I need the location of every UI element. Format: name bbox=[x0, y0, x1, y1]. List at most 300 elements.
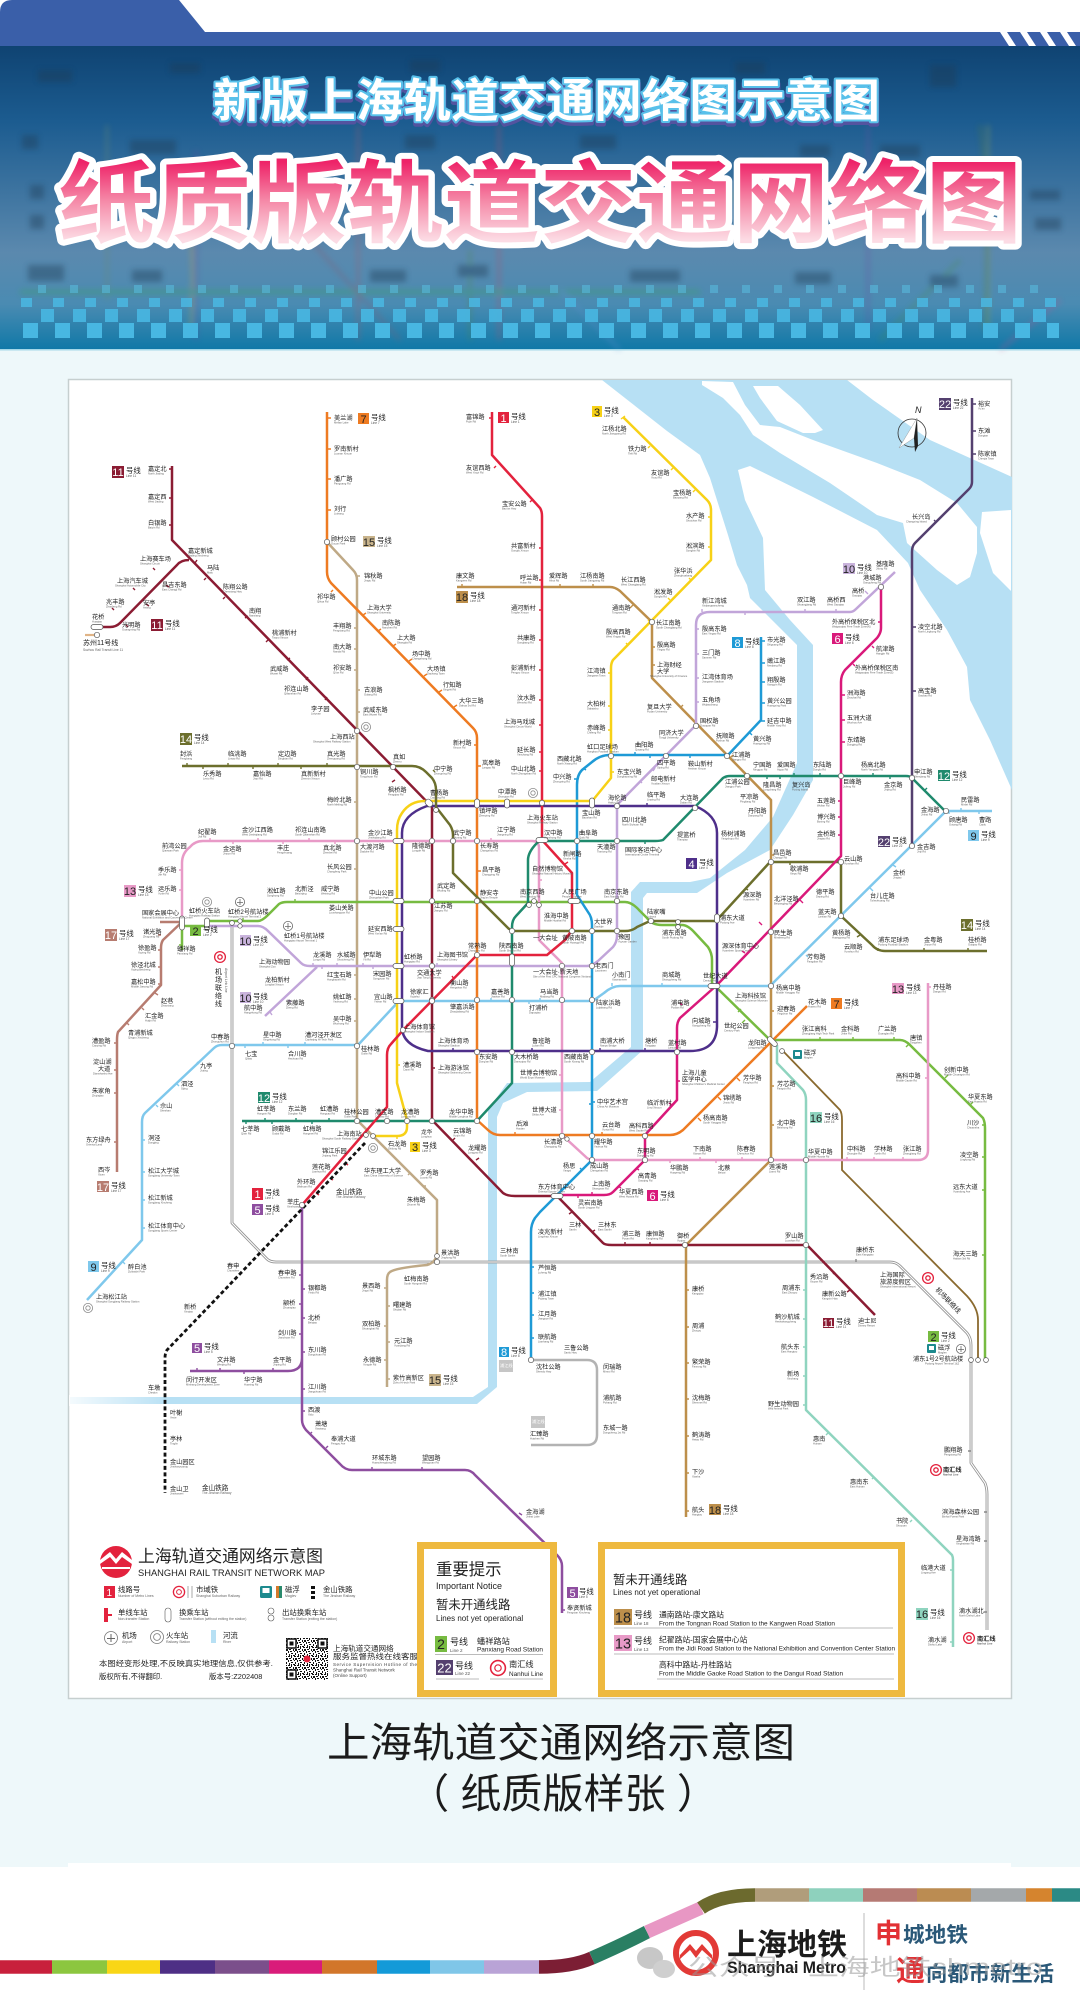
station labels: line 8 and 9: Middle Yanji Rd bbox=[767, 724, 786, 728]
station labels: line 10, 12, 18: 虹漕路 bbox=[320, 1106, 339, 1113]
Nanhui line labels: 南汇线 bbox=[943, 1467, 962, 1474]
station labels: line 10, 12, 18: 航中路 bbox=[244, 1005, 263, 1012]
station labels: line 1: Pengpu Xincun bbox=[511, 670, 530, 674]
vertical label: Airport Link Line: 联 bbox=[215, 983, 222, 992]
station labels: line 13, 14, 17: Yunshun Rd bbox=[844, 950, 859, 954]
station labels: line 8 and 9: Shendu Hwy bbox=[536, 1370, 552, 1374]
station labels: line 13, 14, 17: 青浦新城 bbox=[128, 1030, 153, 1037]
panel: lines not yet operational bbox=[602, 1546, 902, 1694]
station labels: line 4 and 6: 大木桥路 bbox=[514, 1054, 539, 1061]
hotline text bbox=[333, 1643, 418, 1678]
station labels: line 7: Yaohua Rd bbox=[594, 1144, 608, 1148]
line: Pujiang gray bbox=[531, 1360, 597, 1445]
legend title: SHANGHAI RAIL TRANSIT NETWORK MAP bbox=[138, 1568, 325, 1578]
station labels: line 13, 14, 17: Middle Jiasong Rd bbox=[131, 984, 154, 988]
station labels: line 10, 12, 18: 新江湾城 bbox=[702, 598, 727, 605]
station labels: line 8 and 9: Dashijie bbox=[594, 924, 604, 928]
station labels: line 8 and 9 bbox=[96, 636, 992, 1440]
station labels: line 8 and 9: 鞍山新村 bbox=[688, 761, 713, 768]
station labels: line 15: Yuanjiang Rd bbox=[394, 1344, 410, 1348]
line 9 bbox=[87, 808, 992, 1300]
Nanhui line labels: Nanhui Line bbox=[943, 1472, 959, 1476]
station labels: line 8 and 9: 江月路 bbox=[538, 1311, 557, 1318]
station labels: line 7: 高科西路 bbox=[629, 1123, 654, 1130]
station labels: line 10, 12, 18: Xiepu Rd bbox=[790, 872, 802, 876]
station labels: line 10, 12, 18: 爱国路 bbox=[777, 762, 796, 769]
legend: river: River bbox=[223, 1640, 232, 1644]
station labels: line 10, 12, 18: Yingao Rd bbox=[657, 648, 670, 652]
station labels: line 10, 12, 18: 康文路 bbox=[456, 573, 475, 580]
station labels: line 13, 14, 17: 真光路 bbox=[327, 751, 346, 758]
station labels: line 8 and 9: 陆家浜路 bbox=[596, 1000, 621, 1007]
station labels: line 7: Liuhang bbox=[334, 512, 344, 516]
station labels: line 8 and 9: 翔殷路 bbox=[767, 677, 786, 684]
station labels: line 8 and 9: Middle Yanggao Rd bbox=[776, 990, 800, 994]
compass: N bbox=[915, 405, 922, 415]
station labels: line 10, 12, 18: Fudan University bbox=[647, 710, 668, 714]
station labels: line 10, 12, 18: Hangtou bbox=[692, 1512, 703, 1516]
station labels: line 11: Fengqiao Rd bbox=[388, 792, 404, 796]
station labels: line 15: Guilin Park bbox=[344, 1114, 358, 1118]
station labels: line 8 and 9: Lantian Rd bbox=[818, 914, 832, 918]
station labels: line 16, 22, 5, railway: 滴水湖北 bbox=[959, 1608, 984, 1615]
station labels: line 10, 12, 18: Jinjing Rd bbox=[884, 788, 896, 792]
Shanghai Metro logo bbox=[676, 1933, 716, 1973]
line badges: 6 bbox=[649, 1191, 656, 1203]
station labels: line 4 and 6: Xiangcheng Rd bbox=[692, 1024, 711, 1028]
station labels: line 10, 12, 18: Shuicheng Rd bbox=[337, 958, 354, 962]
station labels: line 7: South Yanggao Rd bbox=[703, 1120, 726, 1124]
station labels: line 16, 22, 5, railway: 剑川路 bbox=[278, 1330, 297, 1337]
station labels: line 2: 凌空路 bbox=[960, 1152, 979, 1159]
station labels: line 13, 14, 17: 世博会博物馆 bbox=[520, 1070, 557, 1077]
station labels: line 13, 14, 17: 陈春路 bbox=[737, 1146, 756, 1153]
station labels: line 13, 14, 17: Middle Gaoke Rd bbox=[896, 1078, 917, 1082]
line badges: Line 14 bbox=[194, 741, 205, 745]
station labels: line 1: Gongkang Rd bbox=[517, 640, 534, 644]
station labels: line 13, 14, 17: Zhaoxiang bbox=[161, 1004, 174, 1008]
station labels: line 11: Zhenru bbox=[393, 760, 402, 764]
station labels: line 7: 岚皋路 bbox=[482, 760, 501, 767]
row: line 13: 纪翟路站-国家会展中心站 bbox=[659, 1634, 748, 1644]
station labels: line 10, 12, 18: Pingliang Rd bbox=[740, 800, 756, 804]
station labels: line 4 and 6: 大连路 bbox=[680, 795, 699, 802]
station labels: line 8 and 9: Sanlu Hwy bbox=[564, 1350, 578, 1354]
station labels: line 11: Shanghai Circuit bbox=[140, 562, 160, 566]
station labels: line 2: 海天三路 bbox=[953, 1251, 978, 1258]
station labels: line 11: 徐家汇 bbox=[410, 989, 429, 996]
station labels: line 7: Shangda Rd bbox=[397, 640, 412, 644]
station labels: line 8 and 9: 中华艺术宫 bbox=[597, 1099, 628, 1106]
hotline text: (Online Support) bbox=[333, 1673, 367, 1678]
station labels: line 10, 12, 18: 天潼路 bbox=[597, 844, 616, 851]
station labels: line 1: Lianhua Rd bbox=[312, 1170, 326, 1174]
station labels: line 8 and 9: 曹路 bbox=[979, 817, 991, 824]
station labels: line 10, 12, 18: 上海财经 bbox=[657, 662, 682, 669]
station labels: line 11: Malu bbox=[207, 570, 213, 574]
station labels: line 4 and 6: Dongjing Rd bbox=[847, 742, 862, 746]
row: line 18: Line 18 bbox=[634, 1621, 649, 1626]
notice: Nanhui line: Nanhui Line bbox=[509, 1671, 544, 1678]
station labels: line 15: Shujian Rd bbox=[393, 1308, 407, 1312]
station labels: line 13, 14, 17: National Exhibition and Convention Center bbox=[142, 916, 193, 920]
line badges: 号线 bbox=[111, 1181, 126, 1190]
station labels: line 8 and 9: China Art Museum bbox=[597, 1104, 620, 1108]
station labels: line 15: 桂林路 bbox=[361, 1046, 380, 1053]
checker pattern bbox=[21, 285, 1059, 338]
row: line 18: From the Tongnan Road Station to the Kangwen Road Station bbox=[659, 1620, 836, 1628]
station labels: line 3: Caoxi Rd bbox=[403, 1068, 415, 1072]
station labels: line 11: 三林东 bbox=[598, 1222, 617, 1229]
station labels: line 16, 22, 5, railway: 春申 bbox=[227, 1263, 239, 1270]
station labels: line 11: Kangxin Hwy bbox=[822, 1296, 838, 1300]
station labels: line 10, 12, 18: 上海图书馆 bbox=[437, 952, 468, 959]
station labels: line 13, 14, 17: 金粤路 bbox=[924, 937, 943, 944]
station labels: line 10, 12, 18: 虹桥1号航站楼 bbox=[284, 933, 325, 940]
row: line 13: Line 13 bbox=[634, 1647, 649, 1652]
station labels: line 13, 14, 17: Zhongning Rd bbox=[434, 772, 451, 776]
slogan bbox=[875, 1919, 1054, 1988]
station labels: line 3: Zhanghuabang bbox=[674, 574, 693, 578]
station labels: line 8 and 9: Luheng Rd bbox=[538, 1270, 552, 1274]
station labels: line 15: 曙建路 bbox=[393, 1302, 412, 1309]
station labels: line 11: 康新公路 bbox=[822, 1291, 847, 1298]
station labels: line 15 bbox=[313, 572, 460, 1384]
station labels: line 4 and 6: 南浦大桥 bbox=[600, 1038, 625, 1045]
station labels: line 4 and 6: 医学中心 bbox=[682, 1075, 707, 1083]
station labels: line 13, 14, 17: Chenchun Rd bbox=[737, 1152, 754, 1156]
station labels: line 15: Wuzhong Rd bbox=[333, 1022, 349, 1026]
station labels: line 10, 12, 18: Tiantong Rd bbox=[597, 850, 612, 854]
line badges: 号线 bbox=[377, 536, 392, 545]
station labels: line 4 and 6: 临平路 bbox=[647, 792, 666, 799]
station labels: line 10, 12, 18: Shenjiang Rd bbox=[914, 774, 931, 778]
Suzhou 11 connector bbox=[85, 634, 97, 636]
station labels: line 4 and 6: Pudian Rd bbox=[671, 1006, 684, 1010]
station labels: line 4 and 6: Waigaoqiao Free Trade Zone(N) bbox=[832, 624, 871, 628]
station labels: line 8 and 9: 黄兴公园 bbox=[767, 698, 792, 705]
heading: 暂未开通线路 bbox=[613, 1572, 688, 1587]
station labels: line 4 and 6: Wulian Rd bbox=[817, 804, 830, 808]
station labels: line 11: Suzhou Rail Transit Line 11 bbox=[83, 648, 123, 652]
station labels: line 8 and 9: Xingzhong Rd bbox=[263, 1038, 280, 1042]
station labels: line 8 and 9: 漕河泾开发区 bbox=[305, 1032, 342, 1039]
station labels: line 11: Oriental Sports Center bbox=[538, 1190, 565, 1194]
station labels: line 3: West Yingao Rd bbox=[606, 634, 626, 638]
station labels: line 4 and 6: 浦东大道 bbox=[720, 915, 745, 922]
main title: 纸质版轨道交通网络图 bbox=[58, 155, 1022, 255]
line badges: Line 13 bbox=[138, 893, 149, 897]
station labels: line 16, 22, 5, railway: 文井路 bbox=[217, 1357, 236, 1364]
station labels: line 10, 12, 18: 一大会址·新天地 bbox=[533, 969, 578, 976]
station labels: line 13, 14, 17: West Jinshajiang Rd bbox=[242, 832, 267, 836]
line 17 bbox=[114, 922, 182, 1172]
line badges: Line 3 bbox=[422, 1149, 431, 1153]
station labels: line 2: Weining Rd bbox=[321, 892, 335, 896]
line badges: Line 9 bbox=[101, 1269, 110, 1273]
station labels: line 16, 22, 5, railway: 奉浦大道 bbox=[331, 1436, 356, 1443]
station labels: line 7: 锦绣路 bbox=[723, 1095, 742, 1102]
station labels: line 4 and 6: 上海儿童 bbox=[682, 1070, 707, 1077]
line badges: 10 bbox=[239, 993, 252, 1005]
station labels: line 8 and 9: 联航路 bbox=[538, 1334, 557, 1341]
station labels: line 16, 22, 5, railway: Gaobao Rd bbox=[918, 694, 932, 698]
station labels: line 1: 外环路 bbox=[297, 1179, 316, 1186]
station labels: line 4 and 6: South Xizang Rd bbox=[564, 1060, 585, 1064]
station labels: line 16, 22, 5, railway: 金平路 bbox=[273, 1357, 292, 1364]
station labels: line 10, 12, 18 bbox=[241, 572, 940, 1516]
line badges: 6 bbox=[834, 634, 841, 646]
station labels: line 2: 金科路 bbox=[841, 1026, 860, 1033]
station labels: line 13, 14, 17: Middle Huaihai Rd bbox=[544, 918, 566, 922]
station labels: line 10, 12, 18: 歇浦路 bbox=[790, 866, 809, 873]
station labels: line 16, 22, 5, railway: 磁浮 bbox=[804, 1050, 816, 1057]
station labels: line 16, 22, 5, railway: 银都路 bbox=[308, 1285, 327, 1292]
row: line 13: From the Jidi Road Station to the National Exhibition and Convention Center Station bbox=[659, 1646, 896, 1652]
station labels: line 4 and 6: 外高桥保税区北 bbox=[832, 619, 875, 626]
station labels: line 15: Yongde Rd bbox=[363, 1362, 377, 1366]
station labels: line 2 bbox=[177, 885, 994, 1366]
station labels: line 10, 12, 18: 虹梅路 bbox=[303, 1126, 322, 1133]
station labels: line 10, 12, 18: 虹莘路 bbox=[257, 1106, 276, 1113]
station labels: line 8 and 9: 马当路 bbox=[540, 989, 559, 996]
station labels: line 13, 14, 17: Zhuguang Rd bbox=[143, 934, 160, 938]
station labels: line 11: 陈翔公路 bbox=[223, 584, 248, 591]
station labels: line 3: Dongbaoxing Rd bbox=[617, 774, 638, 778]
station labels: line 16, 22, 5, railway: 亭林 bbox=[170, 1436, 182, 1443]
station labels: line 2: 唐镇 bbox=[910, 1035, 922, 1042]
station labels: line 8 and 9: 松江大学城 bbox=[148, 1168, 179, 1175]
station labels: line 4 and 6: Yuanshen Sports Centre bbox=[722, 948, 752, 952]
line badges: 号线 bbox=[824, 1112, 839, 1121]
station labels: line 3: 宝山路 bbox=[582, 810, 601, 817]
station labels: line 10, 12, 18: Fangxin Rd bbox=[777, 1086, 791, 1090]
station labels: line 11: 罗山路 bbox=[785, 1233, 804, 1240]
station labels: line 13, 14, 17: 纪翟路 bbox=[198, 829, 217, 836]
station labels: line 8 and 9: Xiangyin Rd bbox=[767, 682, 782, 686]
line badges: 号线 bbox=[101, 1261, 116, 1270]
line badges: 8 bbox=[501, 1347, 507, 1359]
station labels: line 8 and 9: Lujiabang Rd bbox=[596, 1006, 612, 1010]
station labels: line 2: Pudong Airport Terminal 1&2 bbox=[925, 1362, 960, 1366]
station labels: line 11: Wuwei Rd bbox=[270, 672, 283, 676]
station labels: line 4 and 6: 洲海路 bbox=[847, 690, 866, 697]
station labels: line 3: Jiangwan Town bbox=[587, 674, 606, 678]
slogan: 通 bbox=[896, 1956, 925, 1988]
panel: network map bbox=[68, 380, 1012, 1698]
station labels: line 11: Disney Resort bbox=[858, 1324, 875, 1328]
station labels: line 15: Jinqiu Rd bbox=[364, 578, 376, 582]
station labels: line 7: 龙华中路 bbox=[449, 1109, 474, 1116]
station labels: line 3: 大柏树 bbox=[587, 701, 606, 708]
station labels: line 13, 14, 17: 定边路 bbox=[278, 751, 297, 758]
line 8 bbox=[531, 637, 765, 1358]
station labels: line 8 and 9: 成山路 bbox=[590, 1163, 609, 1170]
line badges: 17 bbox=[105, 930, 117, 942]
line badges: Line 11 bbox=[836, 1325, 846, 1329]
station labels: line 8 and 9: Jinqiao bbox=[893, 876, 902, 880]
footer panel bbox=[0, 1863, 1080, 1990]
station labels: line 16, 22, 5, railway: 望园路 bbox=[422, 1455, 441, 1462]
station labels: line 16, 22, 5, railway: Xinghaiwan Rd bbox=[956, 1542, 975, 1546]
line badges: Line 18 bbox=[470, 599, 481, 603]
station labels: line 7: Meilan Lake bbox=[334, 420, 349, 424]
station labels: line 4 and 6: Jinqiao Rd bbox=[817, 836, 830, 840]
station labels: line 15: East China University of Science bbox=[364, 1174, 403, 1178]
station labels: line 7: 东安路 bbox=[479, 1054, 498, 1061]
line badges: Line 8 bbox=[745, 645, 754, 649]
station labels: line 4 and 6: Shuangjiang Rd bbox=[797, 602, 817, 606]
station labels: line 2: 张江高科 bbox=[802, 1026, 827, 1033]
station labels: line 8 and 9: 合川路 bbox=[288, 1051, 307, 1058]
station labels: line 8 and 9: 洞泾 bbox=[148, 1135, 160, 1142]
station labels: line 1: West Youyi Rd bbox=[466, 470, 484, 474]
station labels: line 11: 李子园 bbox=[311, 706, 330, 713]
station labels: line 16, 22, 5, railway: 颛桥 bbox=[283, 1300, 295, 1307]
station labels: line 10, 12, 18: South Changjiang Rd bbox=[656, 626, 682, 630]
station labels: line 4 and 6: 临沂新村 bbox=[647, 1100, 672, 1107]
station labels: line 11: Shanghai Swimming Center bbox=[438, 1070, 471, 1074]
row: Gaoke to Dangui: 高科中路站-丹桂路站 bbox=[659, 1660, 732, 1670]
station labels: line 11: 嘉定新城 bbox=[188, 548, 213, 555]
station labels: line 11: Baiyin Rd bbox=[148, 526, 160, 530]
station labels: line 13, 14, 17: 浦东足球场 bbox=[878, 937, 909, 944]
station labels: line 7: 刘行 bbox=[334, 506, 346, 513]
legend: river bbox=[211, 1630, 238, 1644]
station labels: line 13, 14, 17: 大道 bbox=[98, 1066, 110, 1073]
station labels: line 11: Shanghai Automobile City bbox=[115, 584, 146, 588]
station labels: line 10, 12, 18: Tongji University bbox=[659, 736, 679, 740]
station labels: line 7: 耀华路 bbox=[594, 1139, 613, 1146]
legend: line number: 线路号 bbox=[118, 1585, 140, 1594]
station labels: line 8 and 9: 金桥 bbox=[893, 870, 905, 877]
station labels: line 13, 14, 17: Jinyun Rd bbox=[223, 852, 235, 856]
station labels: line 10, 12, 18: 通南路 bbox=[612, 605, 631, 612]
station labels: line 3: Baoshan Rd bbox=[582, 816, 597, 820]
station labels: line 3: 中潭路 bbox=[498, 789, 517, 796]
Nanhui line labels bbox=[943, 1466, 996, 1646]
station labels: line 10, 12, 18: Shenmei Rd bbox=[692, 1400, 707, 1404]
station labels: line 16, 22, 5, railway: Jianchuan Rd bbox=[278, 1336, 295, 1340]
station labels: line 13, 14, 17: 运乐路 bbox=[158, 886, 177, 893]
station labels: line 10, 12, 18: Yili Rd bbox=[363, 958, 371, 962]
station labels: line 15: 红宝石路 bbox=[327, 972, 352, 979]
station labels: line 8 and 9: Madang Rd bbox=[540, 994, 554, 998]
notice heading: 重要提示 bbox=[436, 1561, 502, 1579]
station labels: line 3: 延安西路 bbox=[368, 926, 393, 933]
station labels: line 16, 22, 5, railway: Jinshanyuanqu bbox=[170, 1464, 189, 1468]
station labels: line 2: Lujiazui bbox=[647, 914, 657, 918]
station labels: line 11: 上海赛车场 bbox=[140, 556, 171, 563]
line badges: 号线 bbox=[836, 1317, 851, 1326]
station labels: line 13, 14, 17: 武定路 bbox=[437, 883, 456, 890]
station labels: line 2: Tangzhen bbox=[910, 1040, 922, 1044]
page background bbox=[0, 350, 1080, 1867]
station labels: line 4 and 6: Deping Rd bbox=[816, 894, 829, 898]
station labels: line 7: 行知路 bbox=[443, 682, 462, 689]
station labels: line 4 and 6: 五莲路 bbox=[817, 798, 836, 805]
line badges: Line 17 bbox=[119, 937, 130, 941]
station labels: line 10, 12, 18: Hongcao Rd bbox=[320, 1112, 335, 1116]
station labels: line 11: East Changji Rd bbox=[162, 588, 182, 592]
station labels: line 13, 14, 17: 乐秀路 bbox=[203, 771, 222, 778]
station labels: line 4 and 6: 东靖路 bbox=[847, 737, 866, 744]
station labels: line 10, 12, 18: Hongxin Rd bbox=[257, 1112, 272, 1116]
station labels: line 13, 14, 17: 张江路 bbox=[903, 1146, 922, 1153]
station labels: line 3: 龙漕路 bbox=[401, 1109, 420, 1116]
station labels: line 11: 昌吉东路 bbox=[162, 582, 187, 589]
station labels: line 16, 22, 5, railway: Xinqiao bbox=[184, 1310, 193, 1314]
station labels: line 7: 静安寺 bbox=[480, 890, 499, 897]
station labels: line 8 and 9: 七宝 bbox=[245, 1051, 257, 1058]
station labels: line 2: 南京东路 bbox=[604, 889, 629, 896]
legend: suburban railway: 市域铁 bbox=[196, 1585, 219, 1594]
line badges: Line 10 bbox=[253, 943, 264, 947]
station labels: line 10, 12, 18: 复兴岛 bbox=[792, 782, 811, 789]
station labels: line 15: Hongbaoshi Rd bbox=[327, 978, 346, 982]
station labels: line 10, 12, 18: Fuxing Island bbox=[792, 788, 808, 792]
line badges: Line 5 bbox=[204, 1350, 213, 1354]
station labels: line 13, 14, 17: 高科中路 bbox=[896, 1073, 921, 1080]
line badges: 2 bbox=[930, 1332, 937, 1344]
station labels: line 7: Yunjin Rd bbox=[453, 1134, 465, 1138]
station labels: line 10, 12, 18: 邮电新村 bbox=[651, 776, 676, 783]
caption: （ 纸质版样张 ） bbox=[408, 1771, 718, 1817]
station labels: line 4 and 6: Zhouhai Rd bbox=[847, 696, 861, 700]
station labels: line 11: Yuqiao bbox=[677, 1238, 686, 1242]
station labels: line 16, 22, 5, railway: 叶榭 bbox=[170, 1410, 182, 1417]
station labels: line 16, 22, 5, railway: North Dishui Lake bbox=[959, 1614, 981, 1618]
station labels: line 15: North Meiling Rd bbox=[327, 802, 348, 806]
station labels: line 8 and 9: 芳甸路 bbox=[807, 954, 826, 961]
station labels: line 1: 共富新村 bbox=[511, 543, 536, 550]
station labels: line 15: Fengxiang Rd bbox=[333, 628, 350, 632]
station labels: line 10, 12, 18: 源深路 bbox=[743, 892, 762, 899]
station labels: line 13, 14, 17: Jile Rd bbox=[158, 872, 167, 876]
line badges: 14 bbox=[180, 734, 192, 746]
station labels: line 10, 12, 18: 提篮桥 bbox=[677, 832, 696, 839]
station labels: line 4 and 6: Yangshupu Rd bbox=[721, 836, 739, 840]
station labels: line 1: Xinzhuang bbox=[287, 1204, 300, 1208]
station labels: line 16, 22, 5, railway: Huinan bbox=[813, 1442, 822, 1446]
Nanhui line labels: 南汇线 bbox=[977, 1636, 996, 1643]
station labels: line 13, 14, 17: 自然博物馆 bbox=[532, 866, 563, 873]
station labels: line 1: Waihuan Rd bbox=[297, 1184, 312, 1188]
station labels: line 16, 22, 5, railway: Jinhai Lake bbox=[526, 1514, 540, 1518]
station labels: line 13, 14, 17: 徐泾北城 bbox=[131, 962, 156, 969]
station labels: line 16, 22, 5, railway: Yu'an bbox=[978, 406, 985, 410]
station labels: line 10, 12, 18: 上海动物园 bbox=[259, 959, 290, 966]
station labels: line 11: Xiuyan Rd bbox=[810, 1280, 823, 1284]
station labels: line 4 and 6: West Gaoqiao bbox=[827, 602, 844, 606]
station labels: line 1: Jinjiang Park bbox=[322, 1154, 338, 1158]
station labels: line 16, 22, 5, railway: 凌空北路 bbox=[918, 624, 943, 631]
line badges: Line 12 bbox=[272, 1100, 283, 1104]
station labels: line 4 and 6: 东明路 bbox=[637, 1148, 656, 1155]
station labels: line 16, 22, 5, railway: 惠南 bbox=[813, 1436, 825, 1443]
station labels: line 10, 12, 18: Zhoupu bbox=[692, 1328, 702, 1332]
station labels: line 8 and 9: Zhongchun Rd bbox=[211, 1040, 229, 1044]
station labels: line 7: 云台路 bbox=[602, 1122, 621, 1129]
station labels: line 16, 22, 5, railway: Yindu Rd bbox=[308, 1290, 319, 1294]
station labels: line 16, 22, 5, railway: East Kangqiao bbox=[856, 1252, 874, 1256]
station labels: line 4 and 6: Linping Rd bbox=[647, 798, 660, 802]
station labels: line 16, 22, 5, railway: Changxing Island bbox=[906, 520, 927, 524]
station labels: line 13, 14, 17: Xujing Beicheng bbox=[131, 968, 151, 972]
notice: line 2: 号线 bbox=[450, 1636, 468, 1647]
station labels: line 11: 嘉定北 bbox=[148, 466, 167, 473]
disclaimer bbox=[99, 1659, 273, 1681]
